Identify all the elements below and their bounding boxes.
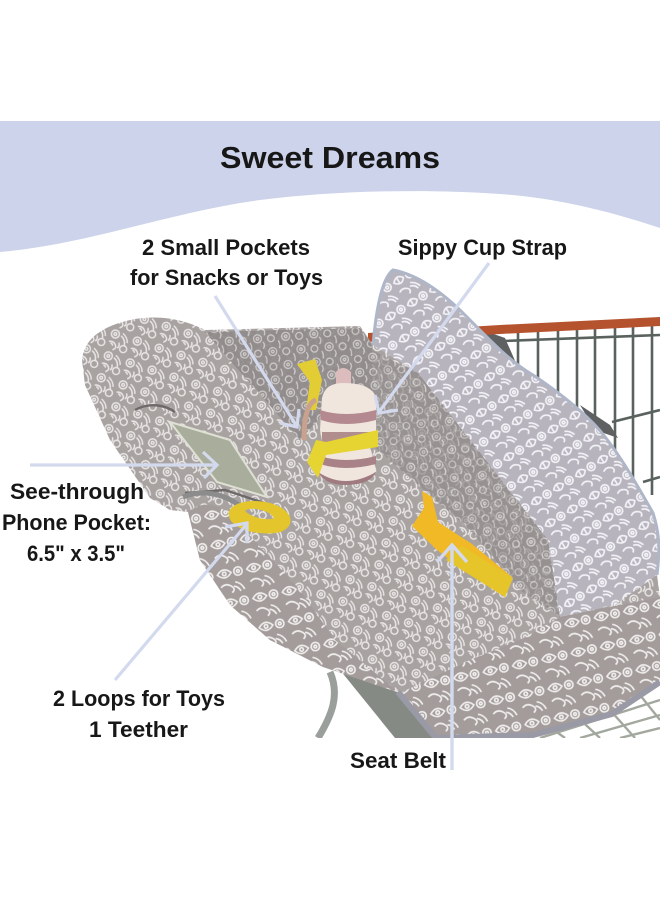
arrow: seat belt <box>437 545 467 770</box>
yellow teether <box>229 501 291 534</box>
yellow seat belt <box>412 491 513 597</box>
right back panel <box>373 270 659 617</box>
arrow: toy loops <box>115 523 247 680</box>
header band <box>0 121 660 252</box>
front lip of seat cover <box>400 597 660 737</box>
cart front leg <box>318 672 334 738</box>
cart lower basket <box>343 674 432 738</box>
label: seat belt: Seat Belt <box>350 748 447 773</box>
label: small pockets: for Snacks or Toys <box>130 265 323 290</box>
back panel piping <box>373 270 659 575</box>
label: small pockets <box>130 235 323 290</box>
label: sippy cup strap: Sippy Cup Strap <box>398 235 567 260</box>
arrow: sippy cup strap <box>375 263 489 413</box>
label: small pockets: 2 Small Pockets <box>142 235 310 260</box>
label: phone pocket: 6.5" x 3.5" <box>27 541 125 566</box>
phone pocket <box>135 405 270 505</box>
teether loop <box>183 493 240 506</box>
arrow: phone pocket <box>30 452 217 478</box>
cart rear basket wires <box>506 326 660 495</box>
label: phone pocket: Phone Pocket: <box>2 510 151 535</box>
arrow: small pockets <box>215 296 299 427</box>
label: phone pocket: See-through <box>10 479 144 504</box>
cart bottom wire grid <box>540 697 660 738</box>
yellow cup strap <box>307 430 378 478</box>
title: Sweet Dreams <box>220 140 440 175</box>
sippy cup <box>304 368 376 485</box>
inner back cushion <box>205 328 372 440</box>
product photo: shopping cart cover <box>82 270 660 738</box>
front left bolster <box>188 505 400 693</box>
cart red handle <box>368 317 660 342</box>
label: phone pocket <box>2 479 151 566</box>
seat cover silhouette <box>82 318 660 692</box>
label: loops and teether: 1 Teether <box>89 717 188 742</box>
back panel lower section <box>372 350 560 617</box>
yellow strap back loop <box>297 359 322 410</box>
label: loops and teether <box>53 686 225 742</box>
lip piping <box>398 682 660 738</box>
label: loops and teether: 2 Loops for Toys <box>53 686 225 711</box>
cart basket strap shadows <box>482 330 618 438</box>
